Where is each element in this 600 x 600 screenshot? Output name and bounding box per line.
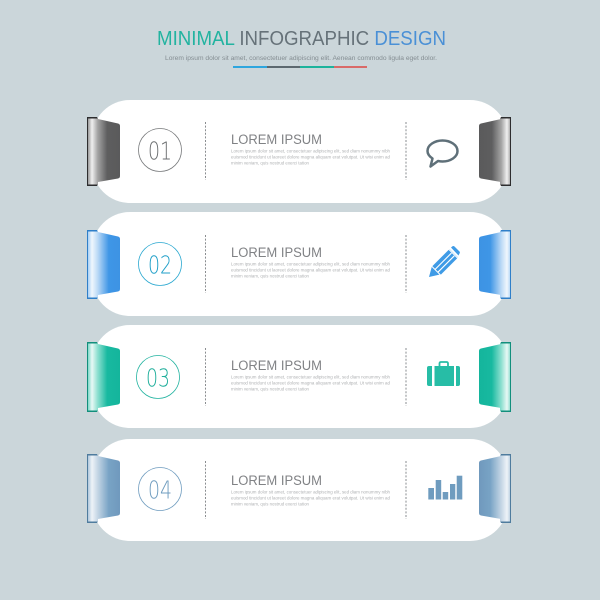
divider bbox=[405, 348, 407, 406]
title: MINIMAL INFOGRAPHIC DESIGN bbox=[157, 28, 446, 50]
left ribbon 03 bbox=[87, 342, 120, 412]
right ribbon 01 bbox=[479, 117, 511, 186]
card 01 bbox=[92, 100, 508, 203]
heading 02: LOREM IPSUM bbox=[231, 245, 322, 260]
number badge 04 bbox=[138, 468, 182, 510]
body text 03: euismod tincidunt ut laoreet dolore magna aliquam erat volutpat. Ut wisi enim ad bbox=[231, 380, 390, 386]
number badge 01: 01 bbox=[148, 136, 172, 166]
heading 03: LOREM IPSUM bbox=[231, 358, 322, 373]
icon: speech bubble bbox=[428, 140, 458, 166]
body text 01: minim veniam, quis nostrud exerci tation bbox=[231, 160, 309, 166]
body text 02: euismod tincidunt ut laoreet dolore magna aliquam erat volutpat. Ut wisi enim ad bbox=[231, 268, 390, 272]
number badge 04: 04 bbox=[148, 476, 172, 504]
divider bbox=[204, 235, 206, 293]
icon: briefcase bbox=[427, 362, 460, 386]
number badge 03: 03 bbox=[146, 364, 170, 392]
number badge 02: 02 bbox=[148, 250, 172, 280]
number badge 01 bbox=[138, 128, 182, 172]
right ribbon 03 bbox=[479, 342, 511, 412]
body text 03: Lorem ipsum dolor sit amet, consectetuer adipiscing elit, sed diam nonummy nibh bbox=[231, 374, 390, 380]
divider bbox=[204, 461, 206, 519]
divider bbox=[204, 348, 206, 406]
icon: pencil bbox=[429, 246, 460, 277]
divider bbox=[405, 235, 407, 293]
icon: bar chart bbox=[428, 476, 462, 500]
number badge 02 bbox=[138, 242, 182, 286]
card 04 bbox=[92, 439, 508, 541]
card 03 bbox=[92, 325, 508, 428]
body text 01: Lorem ipsum dolor sit amet, consectetuer adipiscing elit, sed diam nonummy nibh bbox=[231, 148, 390, 154]
body text 03 bbox=[231, 374, 390, 392]
divider bbox=[405, 122, 407, 180]
right ribbon 02 bbox=[479, 230, 511, 299]
left ribbon 02 bbox=[87, 230, 120, 299]
body text 04 bbox=[231, 490, 390, 506]
body text 04: euismod tincidunt ut laoreet dolore magna aliquam erat volutpat. Ut wisi enim ad bbox=[231, 496, 390, 500]
body text 01 bbox=[231, 148, 390, 166]
number badge 03 bbox=[136, 356, 180, 398]
body text 02: minim veniam, quis nostrud exerci tation bbox=[231, 274, 309, 278]
subtitle: Lorem ipsum dolor sit amet, consectetuer adipiscing elit. Aenean commodo ligula eget dolor. bbox=[165, 55, 437, 62]
body text 02 bbox=[231, 262, 390, 278]
card 02 bbox=[92, 212, 508, 316]
body text 04: Lorem ipsum dolor sit amet, consectetuer adipiscing elit, sed diam nonummy nibh bbox=[231, 490, 390, 494]
divider bbox=[405, 461, 407, 519]
panel: step 01 bbox=[87, 100, 511, 203]
panel: step 03 bbox=[87, 325, 511, 428]
body text 03: minim veniam, quis nostrud exerci tation bbox=[231, 386, 309, 392]
body text 02: Lorem ipsum dolor sit amet, consectetuer adipiscing elit, sed diam nonummy nibh bbox=[231, 262, 390, 266]
divider bbox=[204, 122, 206, 180]
heading 01: LOREM IPSUM bbox=[231, 132, 322, 147]
panel: step 04 bbox=[87, 439, 511, 541]
panel: step 02 bbox=[87, 212, 511, 316]
title underline bbox=[233, 66, 367, 68]
left ribbon 04 bbox=[87, 454, 120, 523]
body text 01: euismod tincidunt ut laoreet dolore magna aliquam erat volutpat. Ut wisi enim ad bbox=[231, 154, 390, 160]
heading 04: LOREM IPSUM bbox=[231, 473, 322, 488]
right ribbon 04 bbox=[479, 454, 511, 523]
left ribbon 01 bbox=[87, 117, 120, 186]
body text 04: minim veniam, quis nostrud exerci tation bbox=[231, 502, 309, 506]
